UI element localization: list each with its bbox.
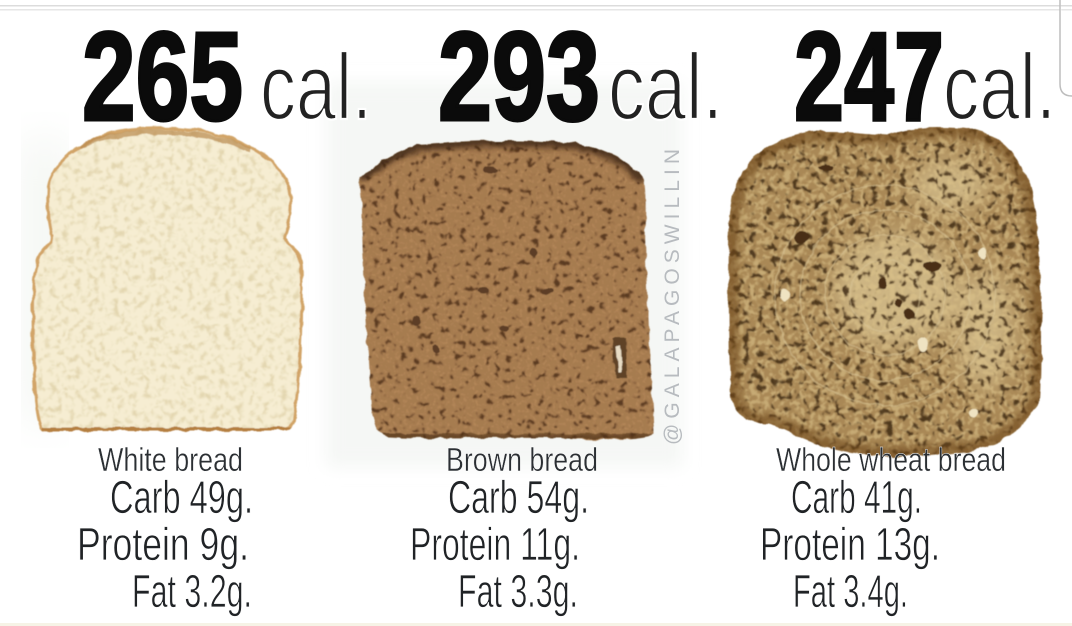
bottom edge strip [0,623,1072,626]
calories: white bread: 265 [82,6,243,147]
nutrition: brown bread: Protein 11g. [410,518,580,570]
swirl grain lines [775,185,995,405]
large pores in brown bread [412,166,554,353]
watermark: @GALAPAGOSWILLIN [661,149,684,445]
nutrition: whole wheat bread: Carb 41g. [791,471,922,523]
calories: brown bread: 293 [438,6,600,147]
nutrition: brown bread [410,441,598,617]
nutrition: white bread: Carb 49g. [110,471,253,523]
calories: white bread: cal. [260,34,372,139]
nutrition: whole wheat bread [760,441,1006,617]
nutrition: whole wheat bread: Protein 13g. [760,518,940,570]
nutrition: white bread: Fat 3.2g. [132,565,252,617]
nutrition: white bread [77,441,253,617]
pale photo backdrop [326,82,682,467]
top interface lines [0,5,1072,10]
air hole in brown bread [612,338,627,378]
nutrition: brown bread: Carb 54g. [448,471,589,523]
nutrition: whole wheat bread: Whole wheat bread [776,441,1006,478]
calories: brown bread: cal. [608,34,723,139]
calories: whole wheat bread: 247 [794,6,944,147]
large pores and seeds in whole wheat bread [781,165,986,418]
bread: white bread [25,120,310,436]
bread: whole wheat bread [722,120,1048,460]
nutrition: brown bread: Fat 3.3g. [458,565,578,617]
light crumb patches [833,159,1013,390]
corner frame top right [1060,0,1072,96]
nutrition: white bread: White bread [98,441,243,478]
nutrition: whole wheat bread: Fat 3.4g. [793,565,908,617]
nutrition: brown bread: Brown bread [446,441,598,478]
nutrition: white bread: Protein 9g. [77,518,249,570]
pale glow: white bread [25,140,65,420]
bread: brown bread [355,136,660,442]
